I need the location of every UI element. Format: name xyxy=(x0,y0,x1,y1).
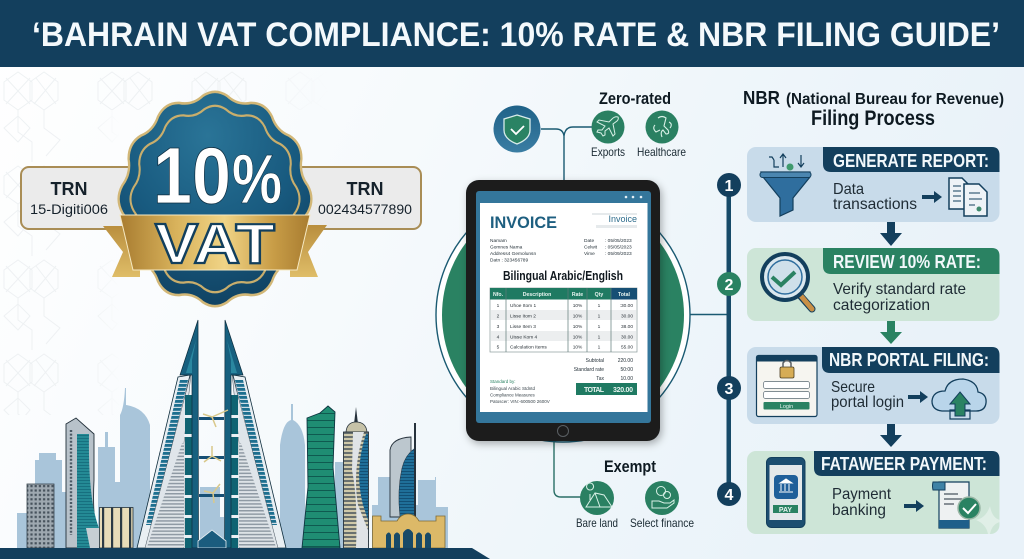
invoice table: 10% xyxy=(573,334,583,340)
green circle behind tablet xyxy=(436,188,690,442)
icon: cloud upload xyxy=(932,379,986,419)
10 percent: % xyxy=(232,140,282,218)
invoice dates: : 05/09/2023 xyxy=(605,251,632,257)
invoice totals: Tax xyxy=(596,376,604,382)
building: golden mosque xyxy=(372,514,445,548)
icon: exports plane xyxy=(592,110,624,144)
invoice table: Calculation Items xyxy=(510,344,547,350)
invoice totals: 50:00 xyxy=(620,367,633,373)
invoice dates: Vime xyxy=(584,251,595,257)
invoice table: Uisse Kom 4 xyxy=(510,334,538,340)
body text xyxy=(833,181,917,213)
bahrain world trade center towers xyxy=(137,320,286,548)
10 percent xyxy=(153,131,282,220)
header text: NBR PORTAL FILING: xyxy=(829,350,989,370)
tablet screen frame xyxy=(476,191,651,423)
invoice right heading xyxy=(592,213,637,228)
trn box right: 002434577890 xyxy=(318,201,412,217)
invoice footer xyxy=(490,379,550,404)
header tab xyxy=(822,347,1000,373)
invoice document xyxy=(480,203,648,412)
connector lines xyxy=(541,127,592,180)
billing details xyxy=(490,238,536,264)
header tab xyxy=(823,248,1000,274)
arrow xyxy=(904,500,924,512)
invoice table: Uhoe Itom 1 xyxy=(510,303,536,309)
ground strip xyxy=(0,548,490,559)
arrow down 2 xyxy=(880,321,902,344)
body text xyxy=(831,379,904,411)
header tab xyxy=(823,147,1000,172)
invoice table: Nfo. xyxy=(493,292,504,298)
building: striped tower with dome xyxy=(344,407,368,548)
invoice totals xyxy=(574,358,633,382)
10 percent: 10 xyxy=(153,131,231,220)
invoice dates: : 05/05/2023 xyxy=(605,238,632,244)
icon: receipt check xyxy=(932,482,980,528)
scalloped seal xyxy=(108,80,322,318)
invoice dates: Date xyxy=(584,238,594,244)
ribbon tails xyxy=(103,225,327,277)
body text: Secure xyxy=(831,379,875,396)
ribbon band xyxy=(120,215,310,270)
invoice table: 5 xyxy=(497,344,500,350)
invoice table: 10% xyxy=(573,344,583,350)
invoice table: 10% xyxy=(573,324,583,330)
step 3 marker: 3 xyxy=(725,381,734,398)
icon: documents xyxy=(949,178,987,216)
connector to exempt xyxy=(554,441,581,497)
nbr heading: Filing Process xyxy=(811,107,935,130)
invoice table: 10% xyxy=(573,303,583,309)
building: green twisted tower xyxy=(302,406,340,548)
tablet status dots xyxy=(625,196,642,198)
vat badge xyxy=(21,80,421,318)
billing details: Datn : 323456789 xyxy=(490,258,528,264)
card: review rate xyxy=(747,248,1000,321)
step 4 marker: 4 xyxy=(725,487,734,504)
header tab xyxy=(814,451,1000,476)
billing details: Address4 Gemolunsn xyxy=(490,251,536,257)
invoice table: 2 xyxy=(497,314,500,320)
step 1 marker: 1 xyxy=(725,178,734,195)
icon: magnifier xyxy=(762,254,812,309)
sky bridges xyxy=(199,417,224,497)
trn box right: TRN xyxy=(346,179,384,199)
step 1 marker xyxy=(717,173,741,197)
invoice table: 1 xyxy=(497,303,500,309)
shield icon xyxy=(494,106,540,152)
invoice table: Qty xyxy=(595,292,603,298)
step 4 marker xyxy=(717,482,741,506)
invoice totals: Standard rate xyxy=(574,367,604,373)
home button xyxy=(558,426,568,436)
nbr heading xyxy=(743,88,1004,130)
step 2 marker xyxy=(717,272,741,296)
invoice footer: Bilingual Arabic Stdntd xyxy=(490,386,536,391)
timeline xyxy=(717,173,741,506)
body text: Data xyxy=(833,181,864,198)
trn box left xyxy=(21,167,143,229)
zero-rated heading: Zero-rated xyxy=(599,89,671,108)
nbr heading: NBR xyxy=(743,88,780,108)
skyline illustration xyxy=(0,320,490,559)
invoice footer: Compliance Measures xyxy=(490,392,536,398)
invoice table: 1 xyxy=(598,334,601,340)
invoice table: 1 xyxy=(598,303,601,309)
step 3 marker xyxy=(717,376,741,400)
invoice totals: 220.00 xyxy=(618,358,633,364)
billing details: Namam xyxy=(490,238,507,244)
invoice table: 4 xyxy=(497,334,500,340)
invoice table xyxy=(490,288,637,352)
building: window block xyxy=(27,484,54,548)
header text: GENERATE REPORT: xyxy=(833,151,989,171)
header text: FATAWEER PAYMENT: xyxy=(821,454,987,474)
header text: REVIEW 10% RATE: xyxy=(833,252,981,272)
title banner xyxy=(0,0,1024,67)
invoice dates: Celwit xyxy=(584,244,598,250)
invoice table: 1 xyxy=(598,324,601,330)
card: generate report xyxy=(747,147,1000,222)
total bar: 320.00 xyxy=(613,387,633,394)
islamic geometric background pattern xyxy=(4,72,246,415)
invoice table: Description xyxy=(523,292,551,298)
icon: bare land xyxy=(580,481,614,515)
sparkle watermark xyxy=(976,506,1000,534)
body text: Payment xyxy=(832,486,892,503)
trn box left: TRN xyxy=(50,179,88,199)
arrow xyxy=(922,191,942,203)
icon: login window: Login xyxy=(780,404,793,410)
invoice table: 38.00 xyxy=(621,324,633,330)
bare land label: Bare land xyxy=(576,516,618,530)
invoice footer: Patoscer: VIN:-600500 2600V xyxy=(490,399,550,404)
invoice table: 3 xyxy=(497,324,500,330)
icon: phone pay xyxy=(766,458,805,528)
card: fataweer payment xyxy=(747,451,1000,534)
invoice table: Rate xyxy=(572,292,583,298)
invoice dates xyxy=(584,238,632,257)
building: beige block xyxy=(100,508,133,548)
arrow down 3 xyxy=(880,424,902,447)
bilingual label: Bilingual Arabic/English xyxy=(503,269,623,283)
trn box right xyxy=(290,167,421,229)
healthcare label: Healthcare xyxy=(637,145,686,159)
invoice table: 1 xyxy=(598,314,601,320)
base pavilion xyxy=(198,530,226,548)
icon: phone pay: PAY xyxy=(779,507,792,514)
invoice totals: 10.00 xyxy=(620,376,633,382)
invoice heading: INVOICE xyxy=(490,213,557,232)
body text: Verify standard rate xyxy=(833,281,966,298)
body text: transactions xyxy=(833,196,917,213)
invoice table: 30.00 xyxy=(621,334,633,340)
nbr heading: (National Bureau for Revenue) xyxy=(786,91,1004,108)
icon: funnel xyxy=(760,154,811,216)
exports label: Exports xyxy=(591,145,625,159)
icon: healthcare xyxy=(646,110,678,144)
vat word: VAT xyxy=(155,212,275,276)
invoice table: Lisse Item 3 xyxy=(510,324,536,330)
building: blue sail tower xyxy=(390,423,416,518)
invoice table: 55.00 xyxy=(621,344,633,350)
connector to timeline xyxy=(689,314,728,316)
invoice footer: Standard by: xyxy=(490,379,516,384)
icon: select finance xyxy=(645,481,679,515)
invoice table: Total xyxy=(618,292,631,298)
invoice right heading: Invoice xyxy=(608,214,637,224)
invoice table: :30.00 xyxy=(620,303,633,309)
body text: banking xyxy=(832,502,886,519)
billing details: Gomnes Nama xyxy=(490,244,523,250)
arrow xyxy=(908,391,928,403)
invoice table: 1 xyxy=(598,344,601,350)
invoice totals: Subtotal xyxy=(586,358,604,364)
step 2 marker: 2 xyxy=(725,277,734,294)
body text xyxy=(833,281,966,314)
body text xyxy=(832,486,892,519)
trn box left: 15-Digiti006 xyxy=(30,201,108,217)
body text: portal login xyxy=(831,394,904,411)
wind turbines xyxy=(203,410,228,503)
total bar xyxy=(576,383,637,395)
exempt heading: Exempt xyxy=(604,457,656,476)
icon: login window xyxy=(756,356,817,416)
total bar: TOTAL xyxy=(584,387,605,394)
building: curved teal tower xyxy=(66,418,99,548)
invoice dates: : 05/05/2023 xyxy=(605,244,632,250)
invoice table: 30.00 xyxy=(621,314,633,320)
tablet xyxy=(466,180,660,441)
background buildings xyxy=(17,388,448,548)
invoice table: 10% xyxy=(573,314,583,320)
arrow down 1 xyxy=(880,222,902,246)
card: portal filing xyxy=(747,347,1000,424)
select finance label: Select finance xyxy=(630,516,694,530)
body text: categorization xyxy=(833,297,930,314)
invoice table: Lisse Itom 2 xyxy=(510,314,536,320)
